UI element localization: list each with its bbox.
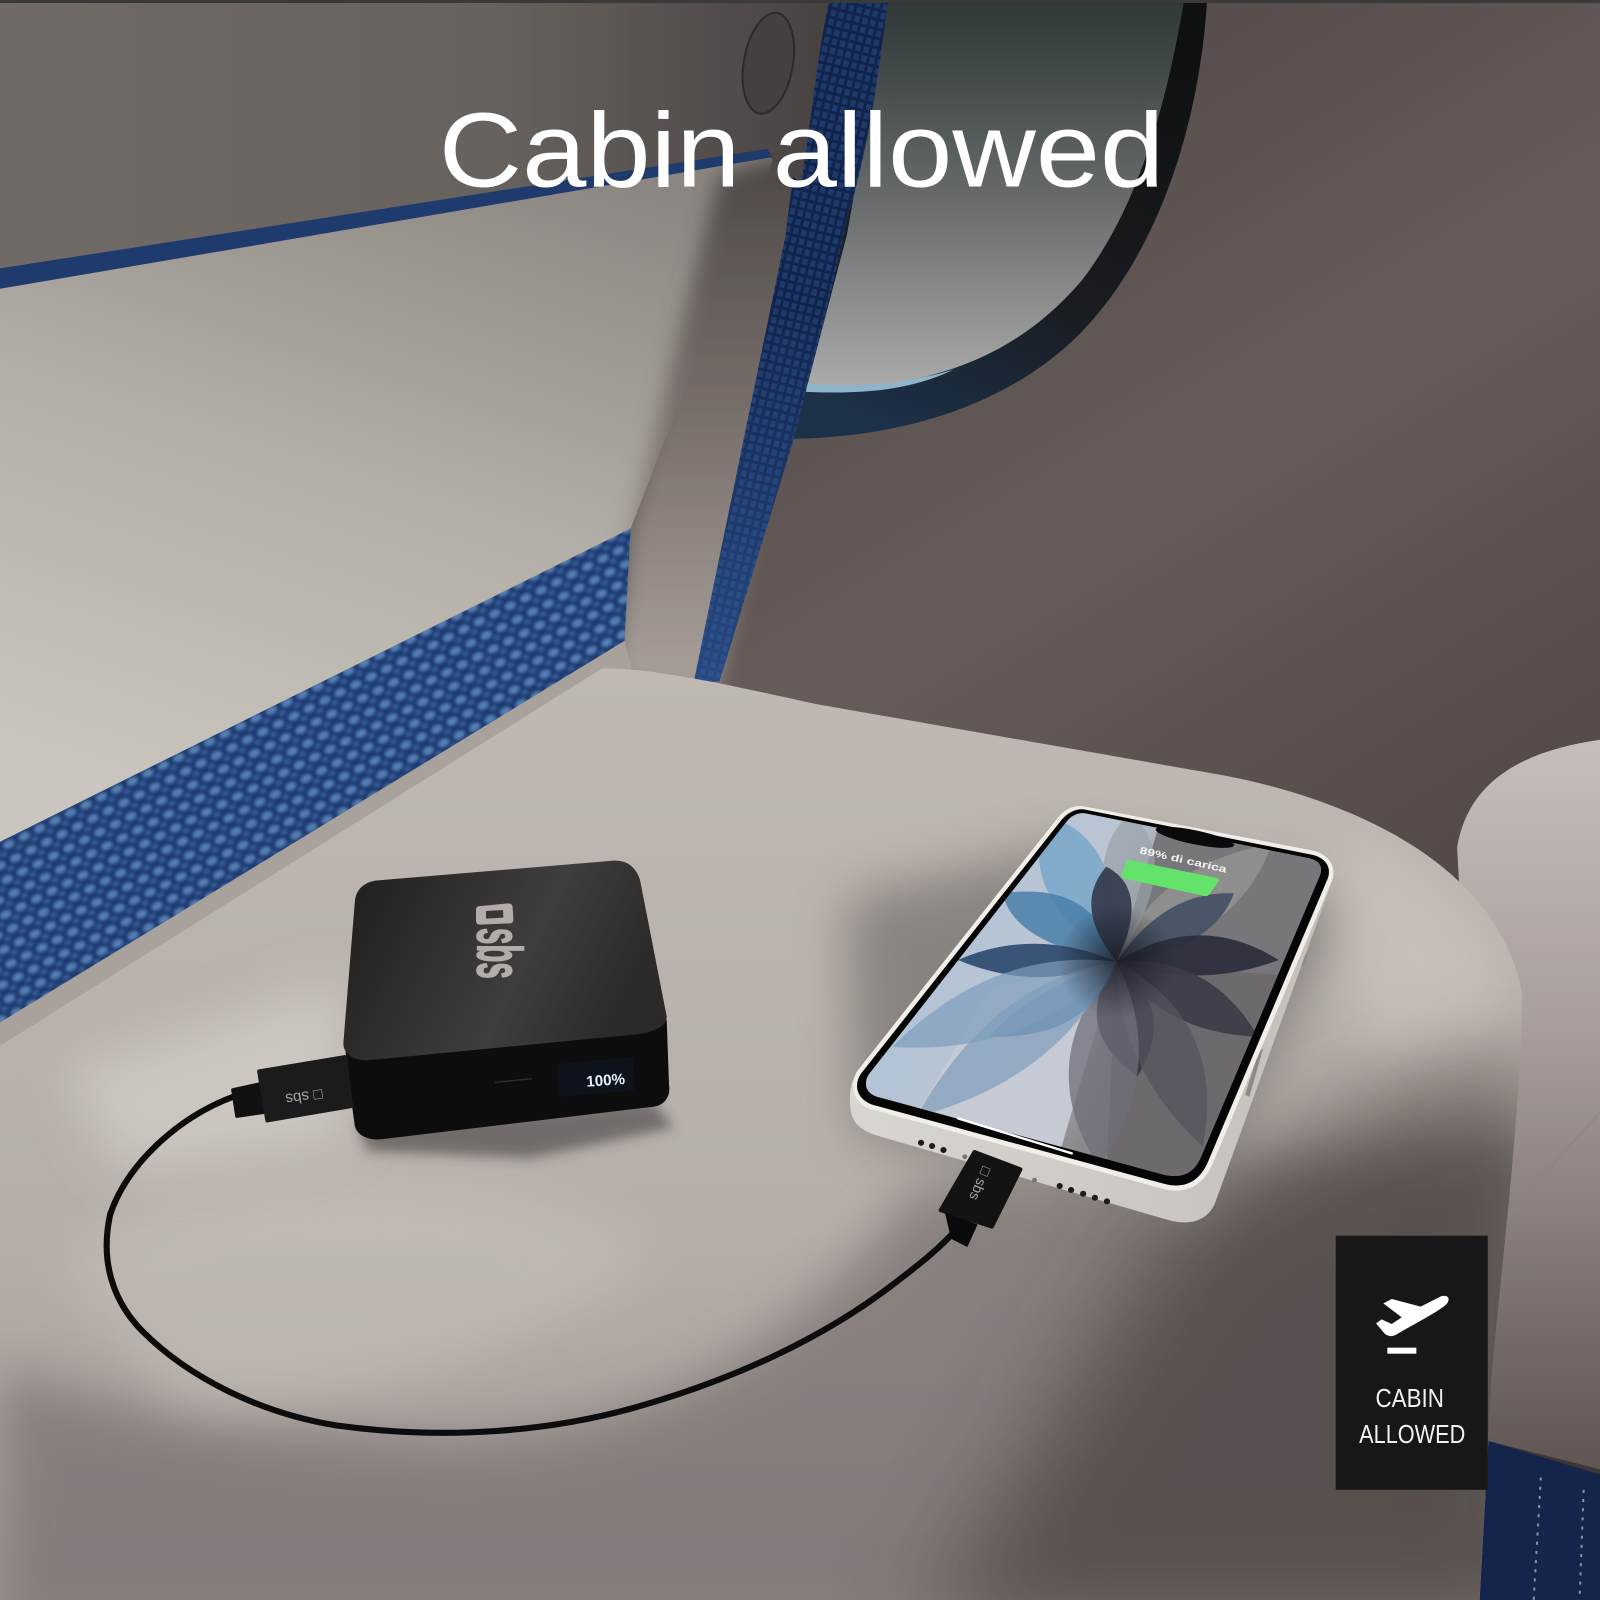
seat back column: [612, 153, 816, 694]
cable connector: phone side: □ sbs: [965, 1164, 994, 1202]
brand logo: [463, 903, 533, 979]
icon: airplane takeoff: [1376, 1296, 1449, 1354]
cable: [107, 1097, 957, 1433]
badge label: ALLOWED: [1359, 1421, 1465, 1449]
seat back upper panel: [0, 3, 829, 270]
phone chassis: [850, 877, 1334, 1222]
phone bezel: [857, 809, 1329, 1185]
power bank: [343, 861, 669, 1139]
battery percent: 100%: [586, 1071, 626, 1091]
window: [794, 0, 1207, 439]
power bank shadow: [357, 1102, 673, 1158]
badge label: CABIN: [1376, 1385, 1444, 1413]
power bank: sbs: [463, 928, 533, 979]
charge label: 89% di carica: [1138, 846, 1228, 876]
right seat: [1457, 740, 1600, 1600]
blue fabric panel: [0, 518, 643, 1033]
blue trim line: [0, 149, 772, 289]
blue seat strip: [694, 0, 888, 682]
cable connector: power bank side: [233, 1057, 351, 1120]
round seat button: [735, 9, 801, 118]
cable connector: phone side: [941, 1152, 1020, 1247]
power bank body side: [345, 1020, 669, 1139]
title: Cabin allowed: [439, 92, 1164, 210]
display panel: [557, 1057, 634, 1097]
power bank top: [343, 861, 667, 1060]
side buttons: [1245, 953, 1306, 1097]
badge: cabin allowed: [1336, 1236, 1488, 1490]
USB-C port: [495, 1079, 532, 1082]
phone front frame: [853, 806, 1334, 1191]
battery indicator: [1121, 860, 1223, 896]
wallpaper with petals: [866, 813, 1322, 1176]
cable connector: power bank side: □ sbs: [284, 1085, 324, 1107]
top edge strip: [0, 0, 1600, 3]
dynamic island: [1154, 822, 1236, 852]
tray table face: [0, 153, 776, 842]
table surface: [0, 641, 1551, 1600]
badge label: [1359, 1385, 1465, 1449]
phone: [850, 806, 1337, 1222]
speaker holes: [918, 1140, 1110, 1204]
home indicator: [958, 1118, 1072, 1153]
